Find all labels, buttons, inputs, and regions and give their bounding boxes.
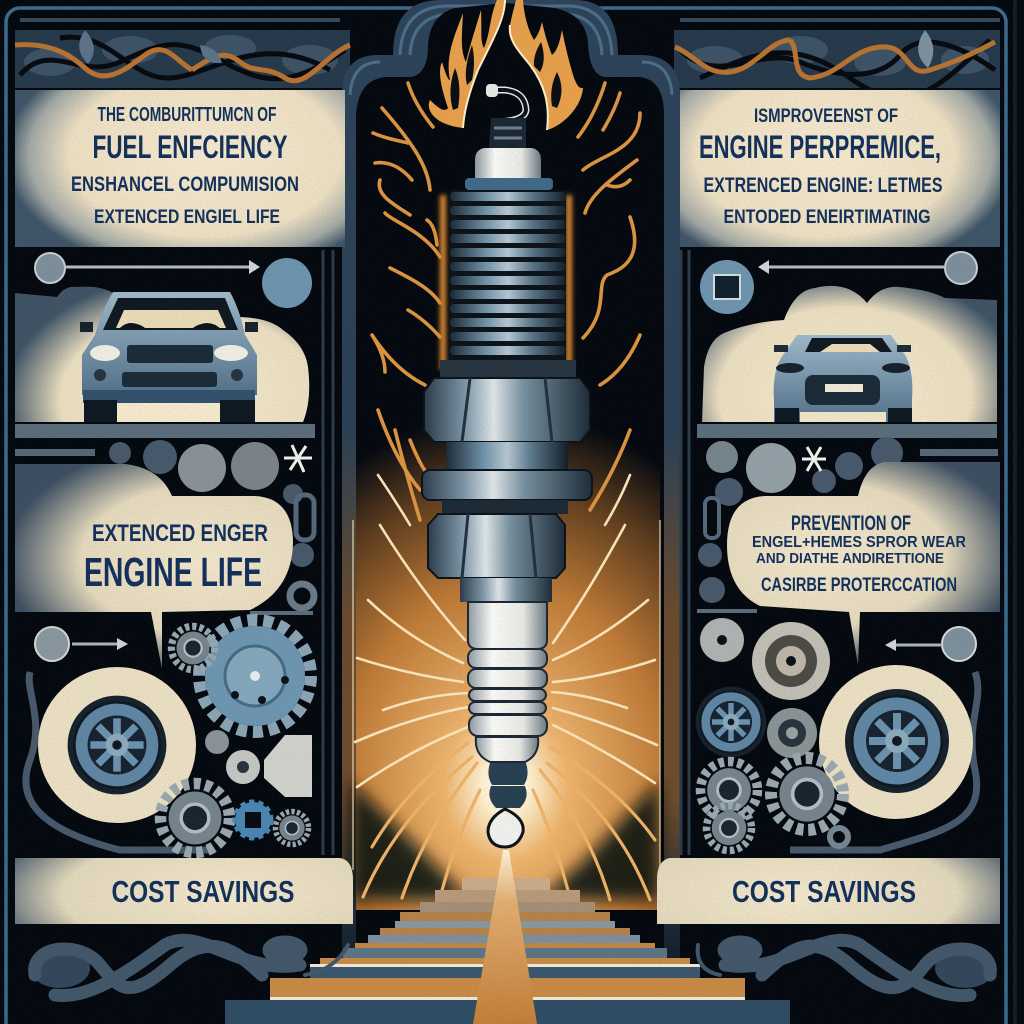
white insulator [468,602,547,762]
rays [355,475,657,900]
center arch with glow [342,0,680,1024]
top-right flame [510,0,583,130]
bubble line 4: CASIRBE PROTERCCATION [761,575,957,596]
right rusty gear [771,758,843,830]
right gear cluster [700,762,758,818]
right divider strip [697,424,997,438]
metal sleeve [460,578,552,602]
right arrow icon [885,627,976,661]
left gears panel [26,611,313,852]
neck under thread [440,360,576,378]
right wheel [696,687,766,757]
panel: left car [15,247,318,422]
right ring [830,828,848,846]
terminal hook [486,84,526,122]
arch inner [356,3,664,1024]
blue collar [465,178,553,190]
left metal part [199,620,311,732]
side flames [372,83,640,520]
right cost savings [657,858,1000,924]
left small gear [171,626,215,670]
left divider strip [15,424,315,438]
left large gear [68,696,166,794]
right gear bottom [706,806,752,850]
terminal stem [489,118,526,148]
floor steps [225,850,790,1024]
right text line 1: ISMPROVEENST OF [754,106,898,127]
arch stone [342,0,680,1024]
top-left ornament [15,30,350,88]
left arrow icon row [35,253,312,308]
collar [446,442,568,470]
thread glow [443,195,569,370]
right disc [767,708,817,758]
right cream disc [819,665,973,819]
wide collar [422,470,592,500]
spark plug [422,84,592,847]
left hex part [264,735,312,797]
left text line 3: ENSHANCEL COMPUMISION [71,173,299,196]
column stripes [323,250,689,855]
left heading: FUEL ENFCIENCY [92,129,288,165]
left gear bottom [160,784,230,852]
bottom-left ornament [30,936,348,996]
left cost savings [15,858,353,924]
flames [372,0,640,520]
left car [80,292,258,422]
right car [774,335,912,422]
bubble line 3: AND DIATHE ANDIRETTIONE [756,550,944,567]
left small disc [226,750,260,784]
center stripe [473,850,537,1024]
left text line 1: THE COMBURITTUMCN OF [98,104,276,126]
panel: right text [680,90,1000,247]
left speech bubble [15,464,293,669]
electrode [488,763,528,847]
left label: COST SAVINGS [112,874,294,909]
right small disc [700,618,744,662]
left cream disc [38,667,196,823]
left mid icons [15,440,314,608]
right label: COST SAVINGS [732,874,916,909]
top-right ornament [674,30,1000,97]
right text line 3: EXTRENCED ENGINE: LETMES [704,174,942,197]
lower hex nut [428,514,565,578]
bubble small title: EXTENCED ENGER [92,520,268,547]
right arrow icon row [700,252,977,314]
bubble big title: ENGINE LIFE [84,549,262,595]
bottom-right ornament [698,936,995,996]
left rope and tube [26,672,210,850]
right text line 4: ENTODED ENEIRTIMATING [724,207,930,228]
left strip [250,611,313,615]
right gears panel [696,609,978,850]
left arrow icon [35,627,128,661]
left mesh gear [205,730,229,754]
panel: right car [692,247,997,422]
lower neck [442,500,568,514]
upper hex nut [424,378,590,442]
right strip [697,609,757,613]
right large wheel [845,689,949,793]
left blue gear [235,802,271,838]
panel: left text [15,90,345,247]
left gear small 2 [276,812,308,844]
right mid icons [698,437,998,603]
right bearing [752,622,830,700]
threaded body [450,190,566,366]
glow field [356,400,660,910]
ceramic top [475,148,541,178]
top-left flame [429,0,505,128]
right speech bubble [727,462,1000,665]
left text line 4: EXTENCED ENGIEL LIFE [94,207,280,228]
bubble line 1: PREVENTION OF [791,512,911,535]
right rope and tube [790,672,978,850]
bubble line 2: ENGEL+HEMES SPROR WEAR [752,534,966,551]
